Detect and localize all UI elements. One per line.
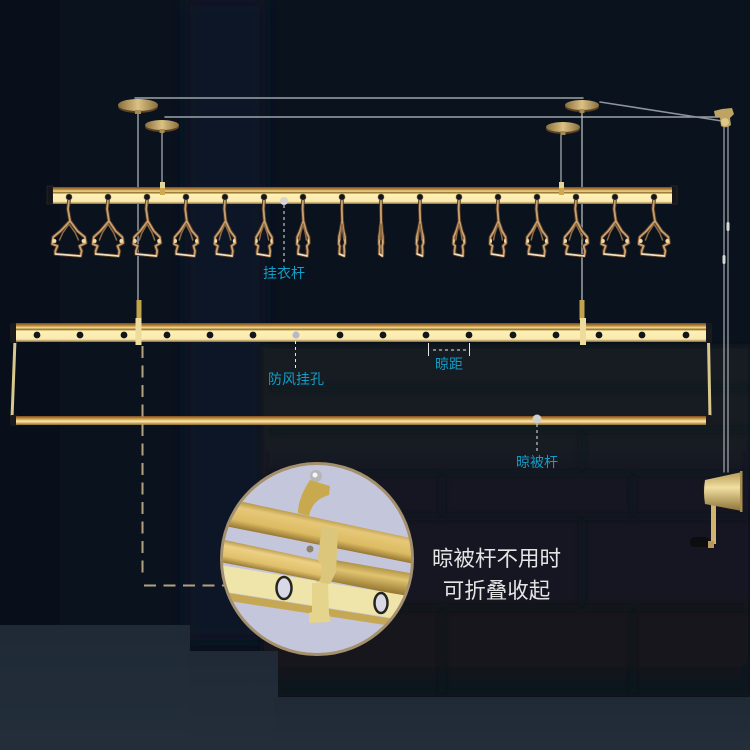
caption: folding note: 晾被杆不用时 [432,547,561,571]
clothes hangers [52,194,669,256]
callout: quilt rod label: 晾被杆 [516,454,558,470]
upper hanging bar [47,182,677,204]
callout: quilt rod label [516,414,558,470]
upper pipe [228,502,411,564]
icon: plate holes [276,577,388,613]
callout: hanging rod label: 挂衣杆 [263,265,305,281]
dashed connector to detail [142,346,224,586]
callout: wind-proof hole label [268,331,324,387]
bolt [306,546,314,552]
lower plate [220,565,415,618]
plate rod [230,593,390,625]
lower quilt-drying frame [10,323,712,426]
bracket [316,526,338,584]
lower stem [309,583,331,623]
caption: folding note: 可折叠收起 [443,579,550,603]
wind-proof bar [16,323,706,342]
detail circle: folded rod close-up [220,464,415,654]
caption: folding note [432,547,561,603]
callout: hanging rod label [263,197,305,281]
back pipe [331,560,410,596]
icon: hand crank winder [690,471,742,548]
icon: ceiling pulleys [118,99,734,135]
callout: spacing label: 晾距 [435,356,463,372]
icon: mounting hook [298,470,330,516]
bar clips [136,300,586,345]
front pipe [220,539,322,581]
quilt rod [16,416,706,425]
callout: wind-proof hole label: 防风挂孔 [268,371,324,387]
cable system [135,98,730,472]
callout: spacing label [428,343,470,372]
wind-proof holes [34,332,689,338]
